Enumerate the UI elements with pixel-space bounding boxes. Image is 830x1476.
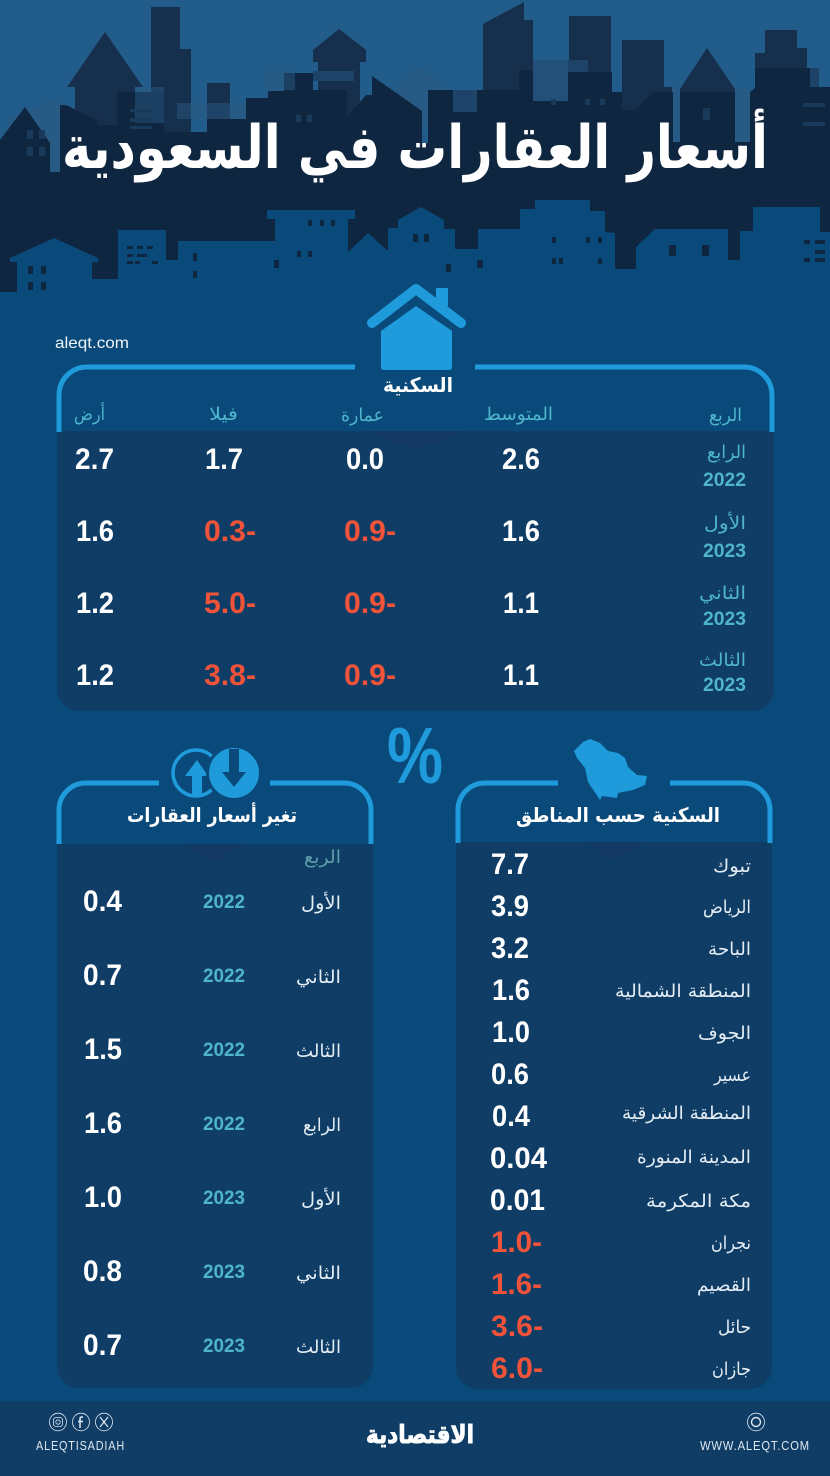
column headers [74,402,742,426]
column headers: الربع [709,405,742,426]
panel: residential table [57,288,774,711]
column headers: أرض [74,402,105,425]
icon: Saudi map [574,739,647,800]
column header: الربع [304,847,341,868]
quarter rows: الثالث [296,1337,341,1358]
region rows: 0.04 [490,1142,547,1175]
source label: aleqt.com [55,335,129,352]
row: Q4 2022: 2.6 [502,443,540,476]
foreground buildings [0,200,830,300]
region rows: 1.6- [491,1268,542,1301]
header skyline [0,0,830,300]
quarter rows: 0.7 [83,1329,122,1362]
region rows: 1.6 [492,974,530,1007]
panel background [57,844,373,1388]
panel: price change [57,746,373,1388]
region rows: الجوف [698,1023,751,1044]
logo: الاقتصادية [366,1420,474,1449]
row: Q2 2023: 5.0- [204,587,256,620]
panel outline [59,783,371,844]
row: Q3 2023: 1.2 [76,659,114,692]
region rows: 0.01 [490,1184,545,1217]
footer [0,1401,830,1476]
row: Q1 2023: 0.9- [344,515,396,548]
quarter rows [83,885,341,1362]
region rows: 3.9 [491,890,529,923]
region rows [490,848,751,1385]
row: Q4 2022: 1.7 [205,443,243,476]
region rows: المنطقة الشرقية [622,1103,751,1124]
panel outline [458,783,770,843]
row: Q3 2023: الثالث [699,650,746,671]
quarter rows: 0.4 [83,885,122,918]
row: Q1 2023: 1.6 [76,515,114,548]
quarter rows: الثالث [296,1041,341,1062]
row: Q3 2023: 2023 [703,675,746,696]
row: Q2 2023: 1.2 [76,587,114,620]
panel background [57,431,774,711]
region rows: الرياض [703,897,751,918]
quarter rows: 2022 [203,1040,245,1061]
region rows: 3.6- [491,1310,543,1343]
quarter rows: 2023 [203,1336,245,1357]
quarter rows: 1.5 [84,1033,122,1066]
quarter rows: الأول [301,892,341,914]
quarter rows: الثاني [296,1263,341,1284]
heading: السكنية حسب المناطق [516,803,720,827]
region rows: 3.2 [491,932,529,965]
region rows: 1.0- [491,1226,542,1259]
region rows: 6.0- [491,1352,543,1385]
region rows: 1.0 [492,1016,530,1049]
row: Q4 2022: 2022 [703,470,746,491]
region rows: الباحة [708,939,751,960]
region rows: المنطقة الشمالية [615,981,751,1002]
region rows: مكة المكرمة [646,1191,751,1212]
region rows: عسير [713,1065,751,1086]
row: Q4 2022: 2.7 [75,443,114,476]
row: Q4 2022: الرابع [707,442,746,463]
row: Q2 2023: 1.1 [503,587,539,620]
row: Q1 2023: 2023 [703,541,746,562]
row: Q4 2022 [75,442,746,491]
quarter rows: 2023 [203,1262,245,1283]
column headers: المتوسط [484,404,553,425]
quarter rows: 0.7 [83,959,122,992]
quarter rows: 2022 [203,1114,245,1135]
region rows: جازان [712,1359,751,1380]
row: Q3 2023: 1.1 [503,659,539,692]
quarter rows: الأول [301,1188,341,1210]
social icons [50,1413,112,1431]
column headers: عمارة [341,405,384,426]
quarter rows: الثاني [296,967,341,988]
region rows: 7.7 [491,848,529,881]
social handle: ALEQTISADIAH [36,1438,125,1453]
row: Q2 2023: 0.9- [344,587,396,620]
row: Q4 2022: 0.0 [346,443,384,476]
column headers: فيلا [209,404,238,425]
quarter rows: 2022 [203,966,245,987]
row: Q3 2023: 3.8- [204,659,256,692]
region rows: نجران [711,1233,751,1254]
row: Q1 2023: 0.3- [204,515,256,548]
website: WWW.ALEQT.COM [700,1438,810,1453]
row: Q1 2023: 1.6 [502,515,540,548]
row: Q1 2023 [76,512,746,562]
quarter rows: 2023 [203,1188,245,1209]
region rows: القصيم [697,1275,751,1296]
icon: house [372,288,461,370]
icon: up and down arrows [173,746,260,800]
region rows: 0.6 [491,1058,529,1091]
quarter rows: 0.8 [83,1255,122,1288]
region rows: 0.4 [492,1100,530,1133]
row: Q2 2023: 2023 [703,609,746,630]
region rows: تبوك [713,856,751,877]
icon: website [748,1413,764,1431]
panel background [456,842,772,1389]
row: Q3 2023 [76,650,746,696]
percent sign: % [387,711,443,800]
heading: السكنية [383,373,453,397]
quarter rows: 1.0 [84,1181,122,1214]
row: Q1 2023: الأول [704,512,746,534]
region rows: حائل [718,1317,751,1338]
row: Q2 2023: الثاني [699,583,746,604]
row: Q3 2023: 0.9- [344,659,396,692]
panel outline [59,367,772,432]
panel: residential by region [456,739,772,1389]
quarter rows: 2022 [203,892,245,913]
region rows: المدينة المنورة [637,1147,751,1168]
heading: تغير أسعار العقارات [127,801,297,827]
row: Q2 2023 [76,583,746,630]
quarter rows: 1.6 [84,1107,122,1140]
quarter rows: الرابع [303,1115,341,1136]
